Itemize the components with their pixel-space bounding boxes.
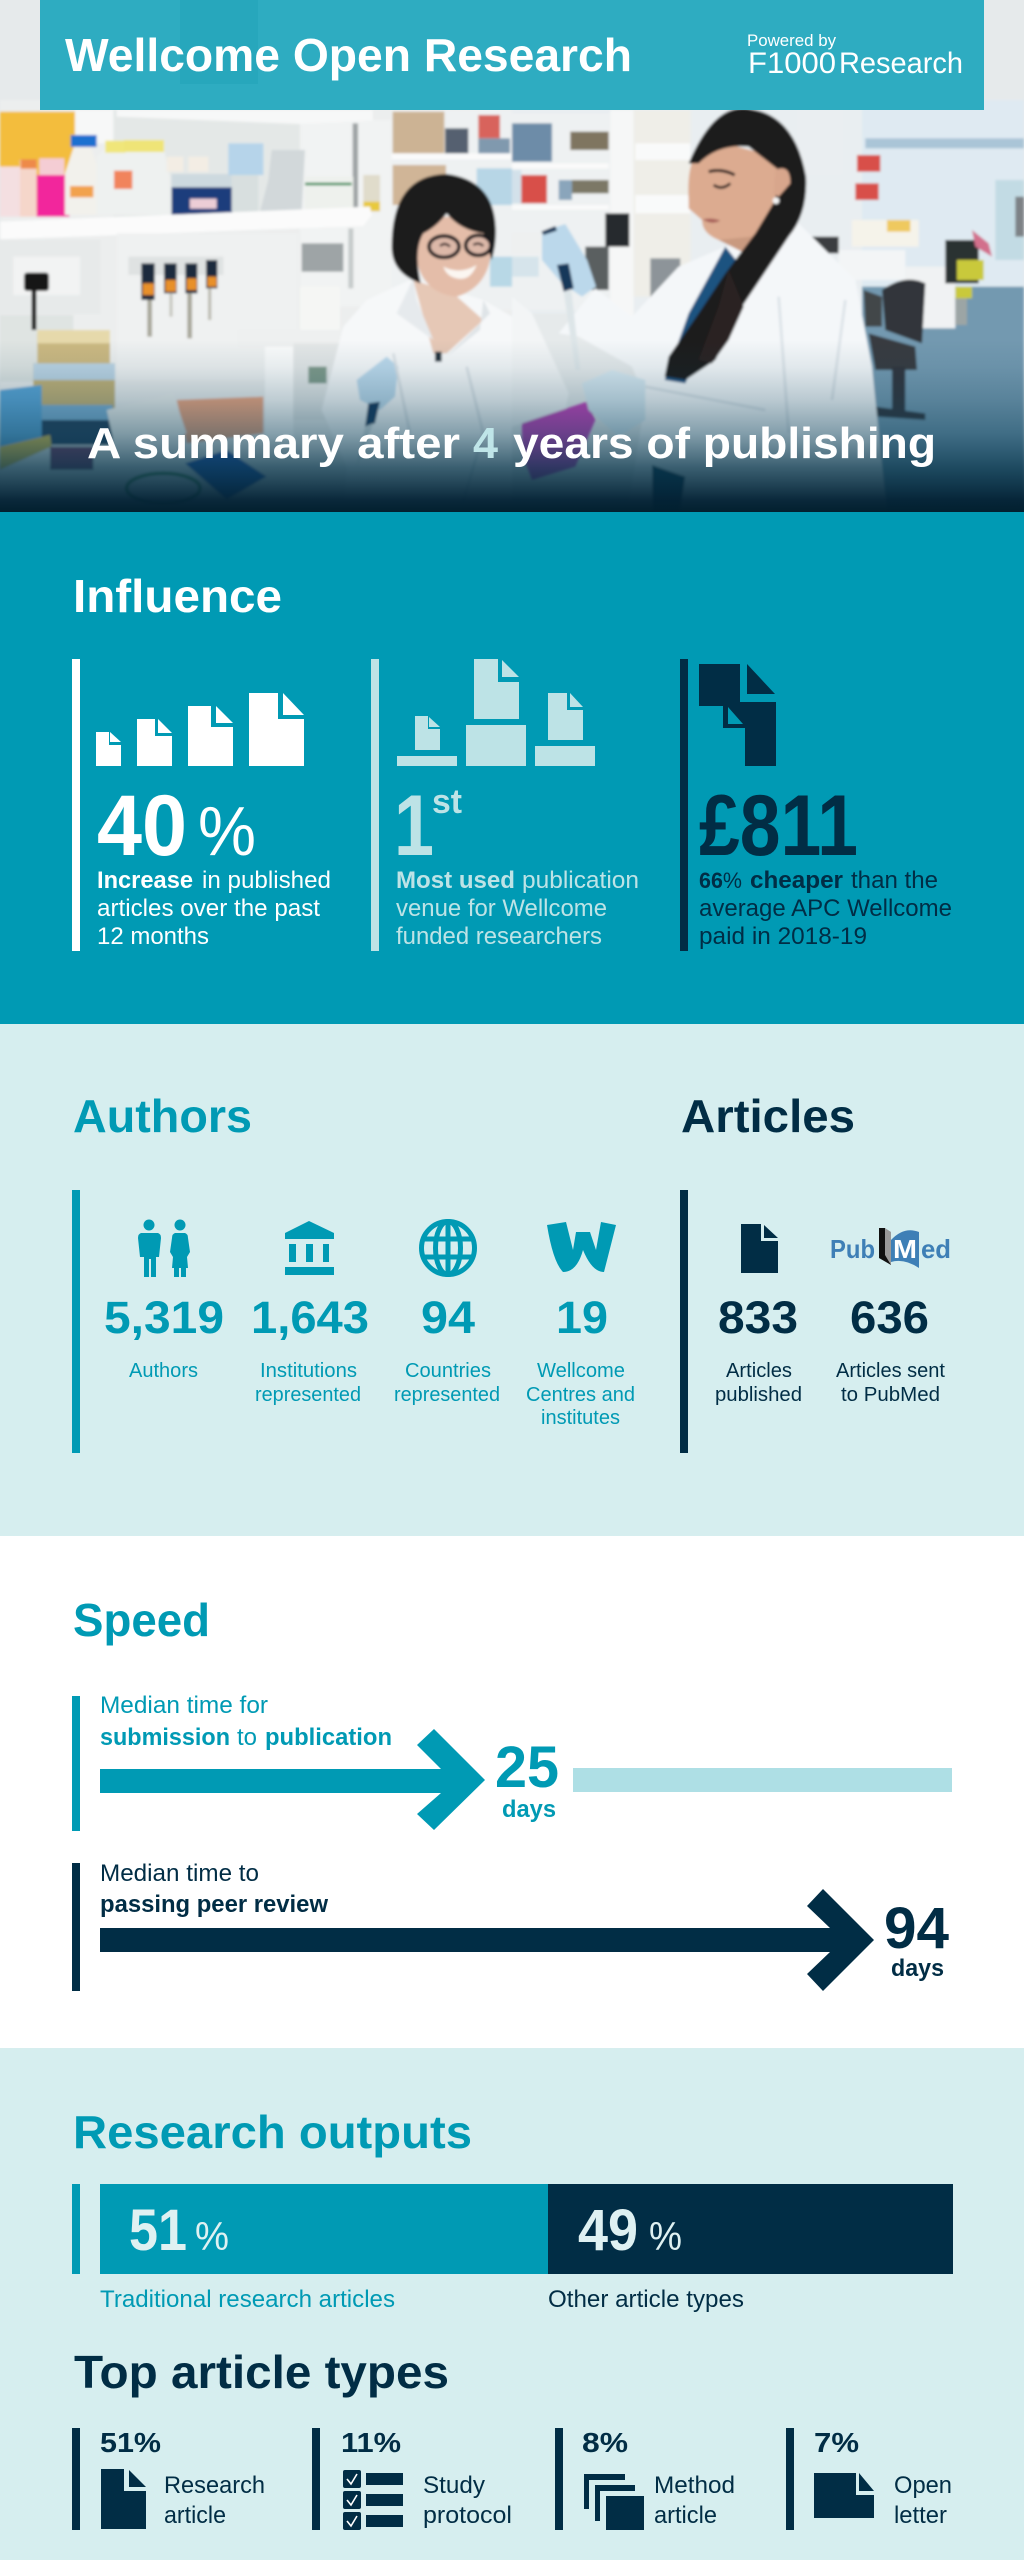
scientist on the right	[512, 108, 887, 513]
stacked bar chart: Other article types	[548, 2286, 744, 2313]
stacked bar chart: Traditional research articles	[100, 2286, 395, 2313]
panel: authors	[72, 1090, 635, 1453]
tip boxes and racks	[36, 342, 112, 365]
article type: method article	[555, 2427, 735, 2530]
panel: authors: Centres and	[526, 1384, 635, 1406]
stat: 1st most used: 1	[394, 778, 434, 874]
icon: layered pages	[584, 2474, 644, 2530]
chair	[882, 280, 925, 343]
submission to publication arrow: to	[237, 1724, 257, 1751]
stat: £811: average APC Wellcome	[699, 895, 952, 922]
icon: PubMed logo	[830, 1228, 951, 1268]
hero subtitle	[87, 419, 936, 468]
hero photo: two scientists in a lab	[0, 0, 1024, 513]
article type: open letter: Open	[894, 2472, 952, 2499]
stat: 40% increase: 12 months	[97, 923, 209, 950]
article type: research article: 51%	[100, 2427, 161, 2458]
stat: 40% increase	[72, 659, 331, 951]
hero subtitle: A summary after	[87, 419, 460, 468]
article type: research article: article	[164, 2502, 226, 2529]
photo: left side of lab	[0, 100, 512, 512]
article type: study protocol: 11%	[341, 2427, 401, 2458]
heading: influence: Influence	[73, 570, 282, 622]
panel: authors: 94	[421, 1292, 475, 1343]
stat: 40% increase: 40	[97, 778, 187, 874]
panel: authors: represented	[255, 1384, 361, 1406]
panel: authors: 1,643	[251, 1292, 369, 1343]
logo: F1000Research: Research	[839, 47, 963, 80]
icon: PubMed logo: M	[893, 1234, 917, 1264]
scientist on the left	[322, 172, 511, 442]
icon: research article	[101, 2469, 146, 2529]
icon: dark document	[699, 664, 776, 766]
panel: authors: Wellcome	[537, 1360, 625, 1382]
panel: authors: Authors	[73, 1090, 252, 1142]
panel: articles: to PubMed	[841, 1384, 940, 1406]
stat: 1st most used: publication	[522, 867, 639, 894]
photo shade	[0, 340, 1024, 512]
submission to publication arrow: Median time for	[100, 1692, 268, 1719]
panel: authors: 5,319	[104, 1292, 224, 1343]
icon: PubMed logo: Pub	[830, 1234, 875, 1264]
panel: authors: institutes	[541, 1407, 620, 1429]
panel: authors: Countries	[405, 1360, 491, 1382]
article type: study protocol: Study	[423, 2472, 485, 2499]
stat: £811: than the	[851, 867, 938, 894]
panel: authors: 19	[556, 1292, 608, 1343]
panel: authors: Authors	[129, 1360, 198, 1382]
article type: method article: 8%	[582, 2427, 628, 2458]
peer review arrow: days	[891, 1955, 944, 1982]
panel: articles: Articles	[726, 1360, 792, 1382]
heading: top article types: Top article types	[74, 2346, 449, 2398]
article type: open letter: letter	[894, 2502, 947, 2529]
panel: articles	[680, 1090, 951, 1453]
icon: open letter	[814, 2473, 874, 2518]
lower wall	[0, 239, 101, 314]
stat: £811: paid in 2018-19	[699, 923, 867, 950]
article type: method article: Method	[654, 2472, 735, 2499]
icon: documents on podium	[397, 659, 595, 766]
panel: articles: 833	[718, 1292, 798, 1343]
photo: right side of lab	[512, 100, 1024, 513]
submission to publication arrow: submission	[100, 1724, 230, 1751]
article type: open letter	[786, 2427, 952, 2530]
submission to publication arrow: days	[502, 1796, 556, 1823]
stat: 1st most used: funded researchers	[396, 923, 602, 950]
icon: people	[138, 1220, 190, 1277]
icon: growing documents	[96, 693, 304, 766]
stat: 40% increase: Increase	[97, 867, 193, 894]
icon: globe	[422, 1221, 474, 1275]
bottles on shelf	[0, 167, 20, 217]
panel: articles: Articles sent	[836, 1360, 945, 1382]
stat: £811: 66%	[699, 868, 742, 893]
article type: study protocol: protocol	[423, 2502, 512, 2529]
stat: 1st most used: venue for Wellcome	[396, 895, 607, 922]
orange box and tissue	[177, 397, 263, 443]
stat: 40% increase: in published	[202, 867, 331, 894]
panel: influence	[0, 512, 1024, 1024]
article type: method article: article	[654, 2502, 717, 2529]
stat: £811	[680, 659, 952, 951]
panel: authors: Institutions	[260, 1360, 357, 1382]
title: Wellcome Open Research	[65, 29, 632, 81]
peer review arrow: Median time to	[100, 1860, 259, 1887]
logo: F1000Research: F1000	[748, 47, 836, 80]
stat: 1st most used	[371, 659, 639, 951]
submission to publication arrow: publication	[265, 1724, 392, 1751]
article type: open letter: 7%	[814, 2427, 859, 2458]
heading: speed: Speed	[73, 1594, 210, 1646]
stat: 1st most used: Most used	[396, 867, 515, 894]
panel: speed	[0, 1536, 1024, 2048]
stacked bar chart: 51	[129, 2198, 187, 2263]
blue rack	[185, 450, 267, 500]
icon: checklist	[343, 2470, 403, 2530]
icon: institution	[285, 1221, 334, 1275]
peer review arrow: passing peer review	[100, 1891, 328, 1918]
hero subtitle: years of publishing	[513, 419, 936, 468]
panel: articles: 636	[850, 1292, 929, 1343]
paper roll and lab machine	[266, 348, 292, 424]
stat: £811: £811	[699, 778, 858, 874]
floor	[862, 287, 1024, 513]
logo: F1000Research	[747, 31, 963, 80]
logo: F1000Research: Powered by	[747, 31, 836, 50]
stacked bar chart: 49	[578, 2198, 638, 2263]
stacked bar chart: %	[649, 2215, 682, 2259]
stat: 1st most used: st	[432, 783, 462, 821]
stat: 40% increase: articles over the past	[97, 895, 320, 922]
stacked bar chart: %	[195, 2215, 229, 2259]
peer review arrow: 94	[884, 1896, 949, 1961]
peer review arrow	[72, 1860, 949, 1991]
icon: Wellcome W	[547, 1222, 616, 1272]
hero subtitle: 4	[473, 419, 499, 468]
panel: articles: published	[715, 1384, 802, 1406]
icon: document	[741, 1224, 778, 1273]
panel: authors and articles	[0, 1024, 1024, 1536]
wall-mounted pipettes	[128, 257, 223, 275]
panel: authors: represented	[394, 1384, 500, 1406]
header band	[40, 0, 984, 110]
heading: research outputs: Research outputs	[73, 2106, 472, 2158]
stat: £811: cheaper	[750, 867, 843, 894]
wall socket	[13, 257, 80, 295]
article type: research article: Research	[164, 2472, 265, 2499]
article type: research article	[72, 2427, 265, 2530]
stat: 40% increase: %	[198, 792, 256, 870]
shelf	[0, 207, 372, 239]
stacked bar chart	[72, 2184, 953, 2313]
submission to publication arrow: 25	[495, 1735, 559, 1800]
icon: PubMed logo: ed	[921, 1234, 951, 1264]
submission to publication arrow	[72, 1692, 952, 1831]
panel: articles: Articles	[681, 1090, 855, 1142]
article type: study protocol	[312, 2427, 512, 2530]
panel: research outputs	[0, 2048, 1024, 2560]
